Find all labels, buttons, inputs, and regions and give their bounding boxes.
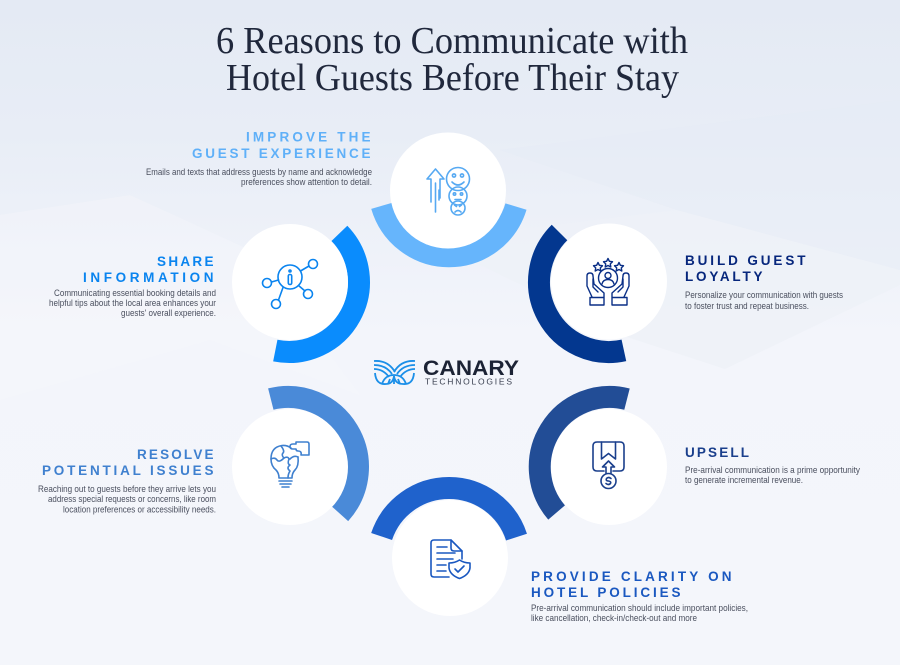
text: improve xyxy=(146,167,372,187)
heading: improve xyxy=(192,130,370,161)
white circle: upsell xyxy=(551,409,667,525)
text: policies: like cancellation, check-in/check-out and more xyxy=(531,613,697,623)
title: 6 Reasons to Communicate with xyxy=(216,20,688,62)
arc: loyalty xyxy=(539,232,624,352)
panel: provide clarity on hotel policies xyxy=(382,488,748,623)
text: resolve: address special requests or concerns, like room xyxy=(48,494,216,504)
text: resolve: Reaching out to guests before they arrive lets you xyxy=(38,484,216,494)
heading: share: INFORMATION xyxy=(83,270,214,285)
tagline: TECHNOLOGIES xyxy=(425,376,512,386)
icon: canary wings xyxy=(374,361,415,384)
heading: policies xyxy=(531,569,732,600)
heading: policies: HOTEL POLICIES xyxy=(531,585,680,600)
icon: information network xyxy=(262,260,318,308)
logo: Canary Technologies xyxy=(374,357,519,386)
panel: build guest loyalty xyxy=(539,224,843,352)
arc: upsell xyxy=(540,397,627,512)
heading: resolve: RESOLVE xyxy=(137,447,214,462)
text: loyalty xyxy=(685,290,843,311)
heading: policies: PROVIDE CLARITY ON xyxy=(531,569,732,584)
heading: resolve xyxy=(42,447,214,478)
icon: hands and stars xyxy=(587,258,629,305)
text: improve: Emails and texts that address guests by name and acknowledge xyxy=(146,167,372,177)
icon: document with shield xyxy=(431,540,470,578)
text: upsell: to generate incremental revenue. xyxy=(685,475,803,485)
text: share: guests' overall experience. xyxy=(121,308,216,318)
white circle: share xyxy=(232,224,348,340)
arc: policies xyxy=(382,488,516,537)
text: loyalty: to foster trust and repeat business. xyxy=(685,301,809,311)
white circle: policies xyxy=(392,500,508,616)
text: resolve xyxy=(38,484,216,515)
panel: upsell xyxy=(540,397,860,525)
heading: loyalty xyxy=(685,253,806,284)
text: upsell xyxy=(685,465,860,485)
heading: improve: IMPROVE THE xyxy=(246,130,370,145)
heading: loyalty: LOYALTY xyxy=(685,269,762,284)
white circle: loyalty xyxy=(551,224,667,340)
white circle: resolve xyxy=(232,409,348,525)
title xyxy=(216,20,688,99)
text: share: helpful tips about the local area enhances your xyxy=(49,298,216,308)
panel: improve the guest experience xyxy=(146,130,516,256)
heading: share: SHARE xyxy=(157,254,214,269)
text: share xyxy=(49,288,216,318)
text: loyalty: Personalize your communication with guests xyxy=(685,290,843,300)
arc: resolve xyxy=(271,397,358,514)
panel: share information xyxy=(49,224,359,352)
panel: resolve potential issues xyxy=(38,397,358,525)
icon: puzzle light bulb xyxy=(271,442,309,487)
heading: resolve: POTENTIAL ISSUES xyxy=(42,463,214,478)
white circle: improve xyxy=(390,132,506,248)
text: share: Communicating essential booking details and xyxy=(54,288,216,298)
text: policies: Pre-arrival communication should include important policies, xyxy=(531,603,748,613)
text: policies xyxy=(531,603,748,623)
title: Hotel Guests Before Their Stay xyxy=(226,57,680,99)
heading: improve: GUEST EXPERIENCE xyxy=(192,146,370,161)
arc: share xyxy=(275,233,359,352)
wordmark: CANARY xyxy=(423,357,519,380)
text: resolve: location preferences or accessibility needs. xyxy=(63,505,216,515)
heading: share xyxy=(83,254,214,285)
text: improve: preferences show attention to detail. xyxy=(241,177,372,187)
heading: loyalty: BUILD GUEST xyxy=(685,253,806,268)
icon: box, arrow and coin xyxy=(593,442,624,488)
heading: upsell: UPSELL xyxy=(685,445,749,460)
arc: improve xyxy=(382,206,516,256)
icon: arrow and faces xyxy=(427,168,470,215)
text: upsell: Pre-arrival communication is a prime opportunity xyxy=(685,465,860,475)
